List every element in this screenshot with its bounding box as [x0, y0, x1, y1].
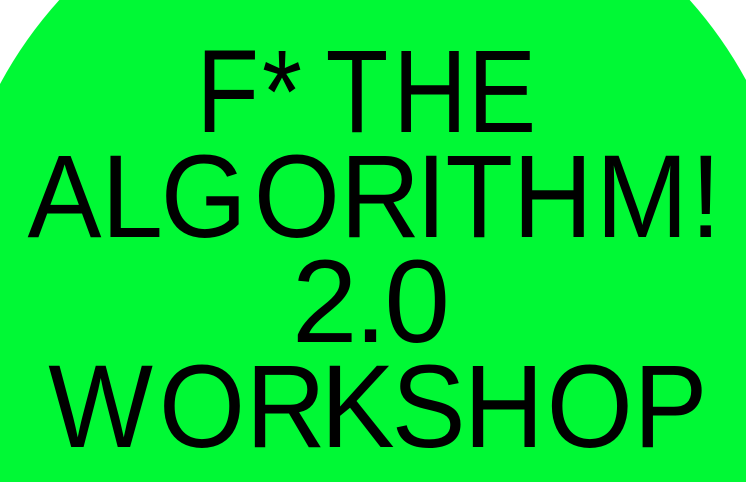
title line: 2.0: 2.0 — [292, 236, 450, 368]
title line: F* THE: F* THE — [196, 26, 536, 158]
title line: WORKSHOP: WORKSHOP — [48, 341, 708, 473]
title line: ALGORITHM!: ALGORITHM! — [28, 131, 721, 263]
